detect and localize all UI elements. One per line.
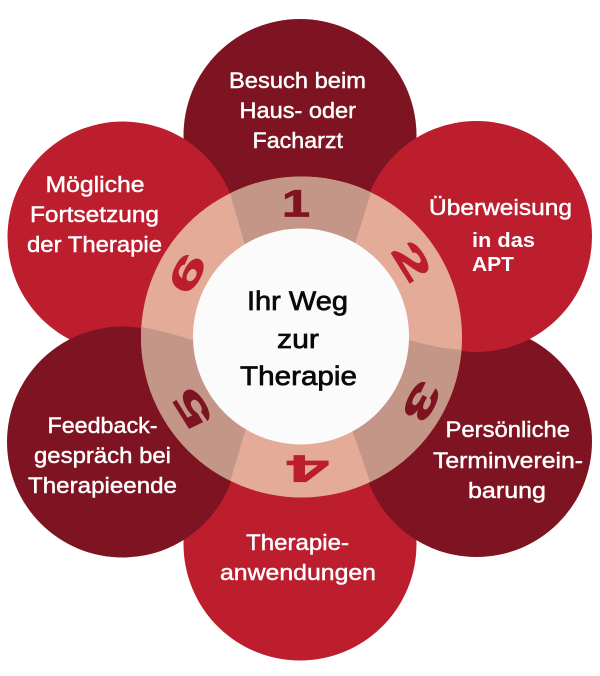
petal 2: Überweisung in das APT <box>361 121 592 352</box>
petal 2: Überweisung in das APT: Überweisung <box>429 195 572 220</box>
number 6: 6 <box>160 246 216 301</box>
number 4: 4 <box>287 446 329 488</box>
title: Ihr Weg zur Therapie: zur <box>277 324 319 354</box>
petal 6: Mögliche Fortsetzung der Therapie: Mögliche <box>46 172 144 197</box>
petal 1: Besuch beim Haus- oder Facharzt: Haus- oder <box>240 98 356 123</box>
petal 3: Persönliche Terminvereinbarung: barung <box>468 478 546 503</box>
title: Ihr Weg zur Therapie: Therapie <box>240 361 357 391</box>
petal 2: Überweisung in das APT: in das <box>472 230 535 252</box>
petal 4: Therapieanwendungen: Therapie- <box>246 530 349 555</box>
center circle with title <box>193 228 409 444</box>
number 3: 3 <box>393 374 449 429</box>
petal 1: Besuch beim Haus- oder Facharzt <box>184 19 416 252</box>
petal 1: Besuch beim Haus- oder Facharzt: Facharzt <box>252 128 343 153</box>
petal 6: Mögliche Fortsetzung der Therapie <box>8 122 238 352</box>
title: Ihr Weg zur Therapie: Ihr Weg <box>247 286 348 316</box>
translucent ring with step sectors <box>141 176 462 498</box>
petal 5: Feedbackgespräch bei Therapieende: gespräch bei <box>34 443 171 468</box>
title: Ihr Weg zur Therapie <box>240 286 357 391</box>
petal 5: Feedbackgespräch bei Therapieende <box>7 326 238 558</box>
petal 3: Persönliche Terminvereinbarung <box>361 326 592 557</box>
petal 1: Besuch beim Haus- oder Facharzt: Besuch beim <box>229 68 366 93</box>
petal 5: Feedbackgespräch bei Therapieende: Feedback- <box>48 413 158 438</box>
petal 4: Therapieanwendungen: anwendungen <box>220 560 376 585</box>
number 5: 5 <box>165 380 222 436</box>
petal 6: Mögliche Fortsetzung der Therapie: Fortsetzung <box>30 202 159 227</box>
number 2: 2 <box>382 234 439 290</box>
petal 3: Persönliche Terminvereinbarung: Persönliche <box>446 417 570 442</box>
petal 4: Therapieanwendungen <box>184 428 416 660</box>
petal 2: Überweisung in das APT: APT <box>472 254 514 276</box>
petal 3: Persönliche Terminvereinbarung: Terminverein- <box>433 448 583 473</box>
petal 6: Mögliche Fortsetzung der Therapie: der Therapie <box>27 232 162 257</box>
petal 5: Feedbackgespräch bei Therapieende: Therapieende <box>28 473 177 498</box>
number 1: 1 <box>282 184 310 226</box>
